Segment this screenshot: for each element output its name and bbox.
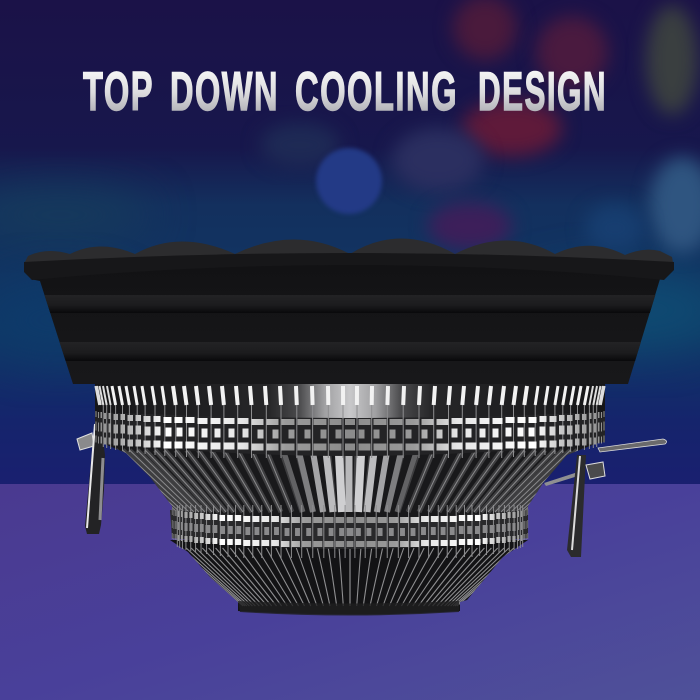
right mounting bracket <box>544 439 667 557</box>
bracket leg left <box>85 423 105 534</box>
bracket screw right <box>586 462 605 479</box>
left mounting bracket <box>77 423 105 534</box>
lower heatsink flare <box>170 540 528 614</box>
title: DESIGN <box>478 60 607 122</box>
upper fin ring <box>95 384 605 458</box>
bracket upper arm <box>598 439 667 452</box>
background: purple table surface <box>0 484 700 700</box>
shroud lip <box>24 253 674 280</box>
title: TOP <box>83 60 154 122</box>
heatsink base <box>238 601 459 616</box>
shroud body <box>30 262 660 384</box>
lower fin ring <box>170 505 528 558</box>
fin stems <box>103 405 597 458</box>
bracket lower arm <box>544 472 578 486</box>
title: DOWN <box>170 60 279 122</box>
upper ring base <box>95 384 605 456</box>
title <box>83 60 607 122</box>
bracket leg right <box>567 455 586 557</box>
white fin tabs <box>95 386 605 405</box>
bracket screw left <box>77 433 94 450</box>
middle heatsink flare <box>104 442 598 518</box>
shroud ribs <box>30 295 670 361</box>
shroud wavy top rim <box>24 238 674 268</box>
title: COOLING <box>295 60 458 122</box>
silver centre fin strips <box>284 452 416 512</box>
background: blurred wall with bokeh lights <box>0 0 700 490</box>
zigzag fin rows <box>96 414 604 447</box>
black fan shroud <box>24 238 674 384</box>
